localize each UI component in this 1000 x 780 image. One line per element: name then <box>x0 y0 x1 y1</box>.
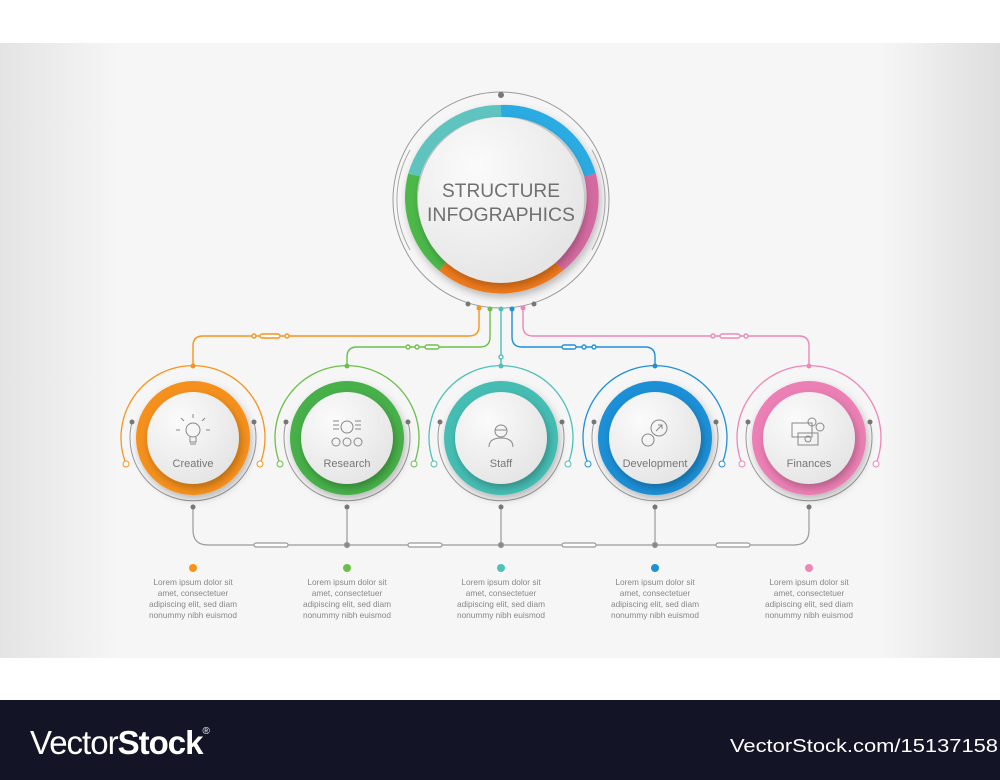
node: Finances <box>737 364 881 510</box>
descriptions: Lorem ipsum dolor sit <box>307 577 387 587</box>
descriptions: amet, consectetuer <box>620 588 691 598</box>
connector lines top <box>193 310 809 368</box>
footer bar: VectorStock <box>30 724 202 761</box>
bottom gray connector <box>193 507 809 548</box>
descriptions: Lorem ipsum dolor sit <box>769 577 849 587</box>
node: Staff <box>429 364 573 510</box>
icon: money <box>792 418 824 445</box>
footer bar: VectorStock.com/15137158 <box>730 736 998 756</box>
node: Development <box>583 364 727 510</box>
descriptions: adipiscing elit, sed diam <box>303 599 391 609</box>
descriptions: nonummy nibh euismod <box>457 610 545 620</box>
icon: gears <box>642 420 667 446</box>
icon: bulb <box>176 414 210 444</box>
descriptions: nonummy nibh euismod <box>149 610 237 620</box>
main circle <box>393 92 609 312</box>
descriptions: adipiscing elit, sed diam <box>457 599 545 609</box>
descriptions: nonummy nibh euismod <box>303 610 391 620</box>
node: Development: Development <box>623 458 687 470</box>
descriptions: Lorem ipsum dolor sit <box>153 577 233 587</box>
node: Creative <box>121 364 265 510</box>
descriptions: amet, consectetuer <box>774 588 845 598</box>
node: Finances: Finances <box>787 458 832 470</box>
main circle: INFOGRAPHICS <box>427 205 575 226</box>
descriptions: adipiscing elit, sed diam <box>611 599 699 609</box>
main circle: STRUCTURE <box>442 181 560 202</box>
footer bar <box>0 700 1000 780</box>
node: Research <box>275 364 419 510</box>
descriptions: nonummy nibh euismod <box>611 610 699 620</box>
descriptions: amet, consectetuer <box>312 588 383 598</box>
node: Creative: Creative <box>173 458 213 470</box>
descriptions: amet, consectetuer <box>466 588 537 598</box>
footer bar: ® <box>202 726 210 737</box>
descriptions: nonummy nibh euismod <box>765 610 853 620</box>
node: Staff: Staff <box>490 458 513 470</box>
icon: person <box>489 425 513 447</box>
descriptions: adipiscing elit, sed diam <box>149 599 237 609</box>
descriptions: Lorem ipsum dolor sit <box>461 577 541 587</box>
descriptions: adipiscing elit, sed diam <box>765 599 853 609</box>
descriptions: amet, consectetuer <box>158 588 229 598</box>
descriptions <box>149 564 853 620</box>
node: Research: Research <box>323 458 371 470</box>
icon: research <box>332 421 362 446</box>
descriptions: Lorem ipsum dolor sit <box>615 577 695 587</box>
